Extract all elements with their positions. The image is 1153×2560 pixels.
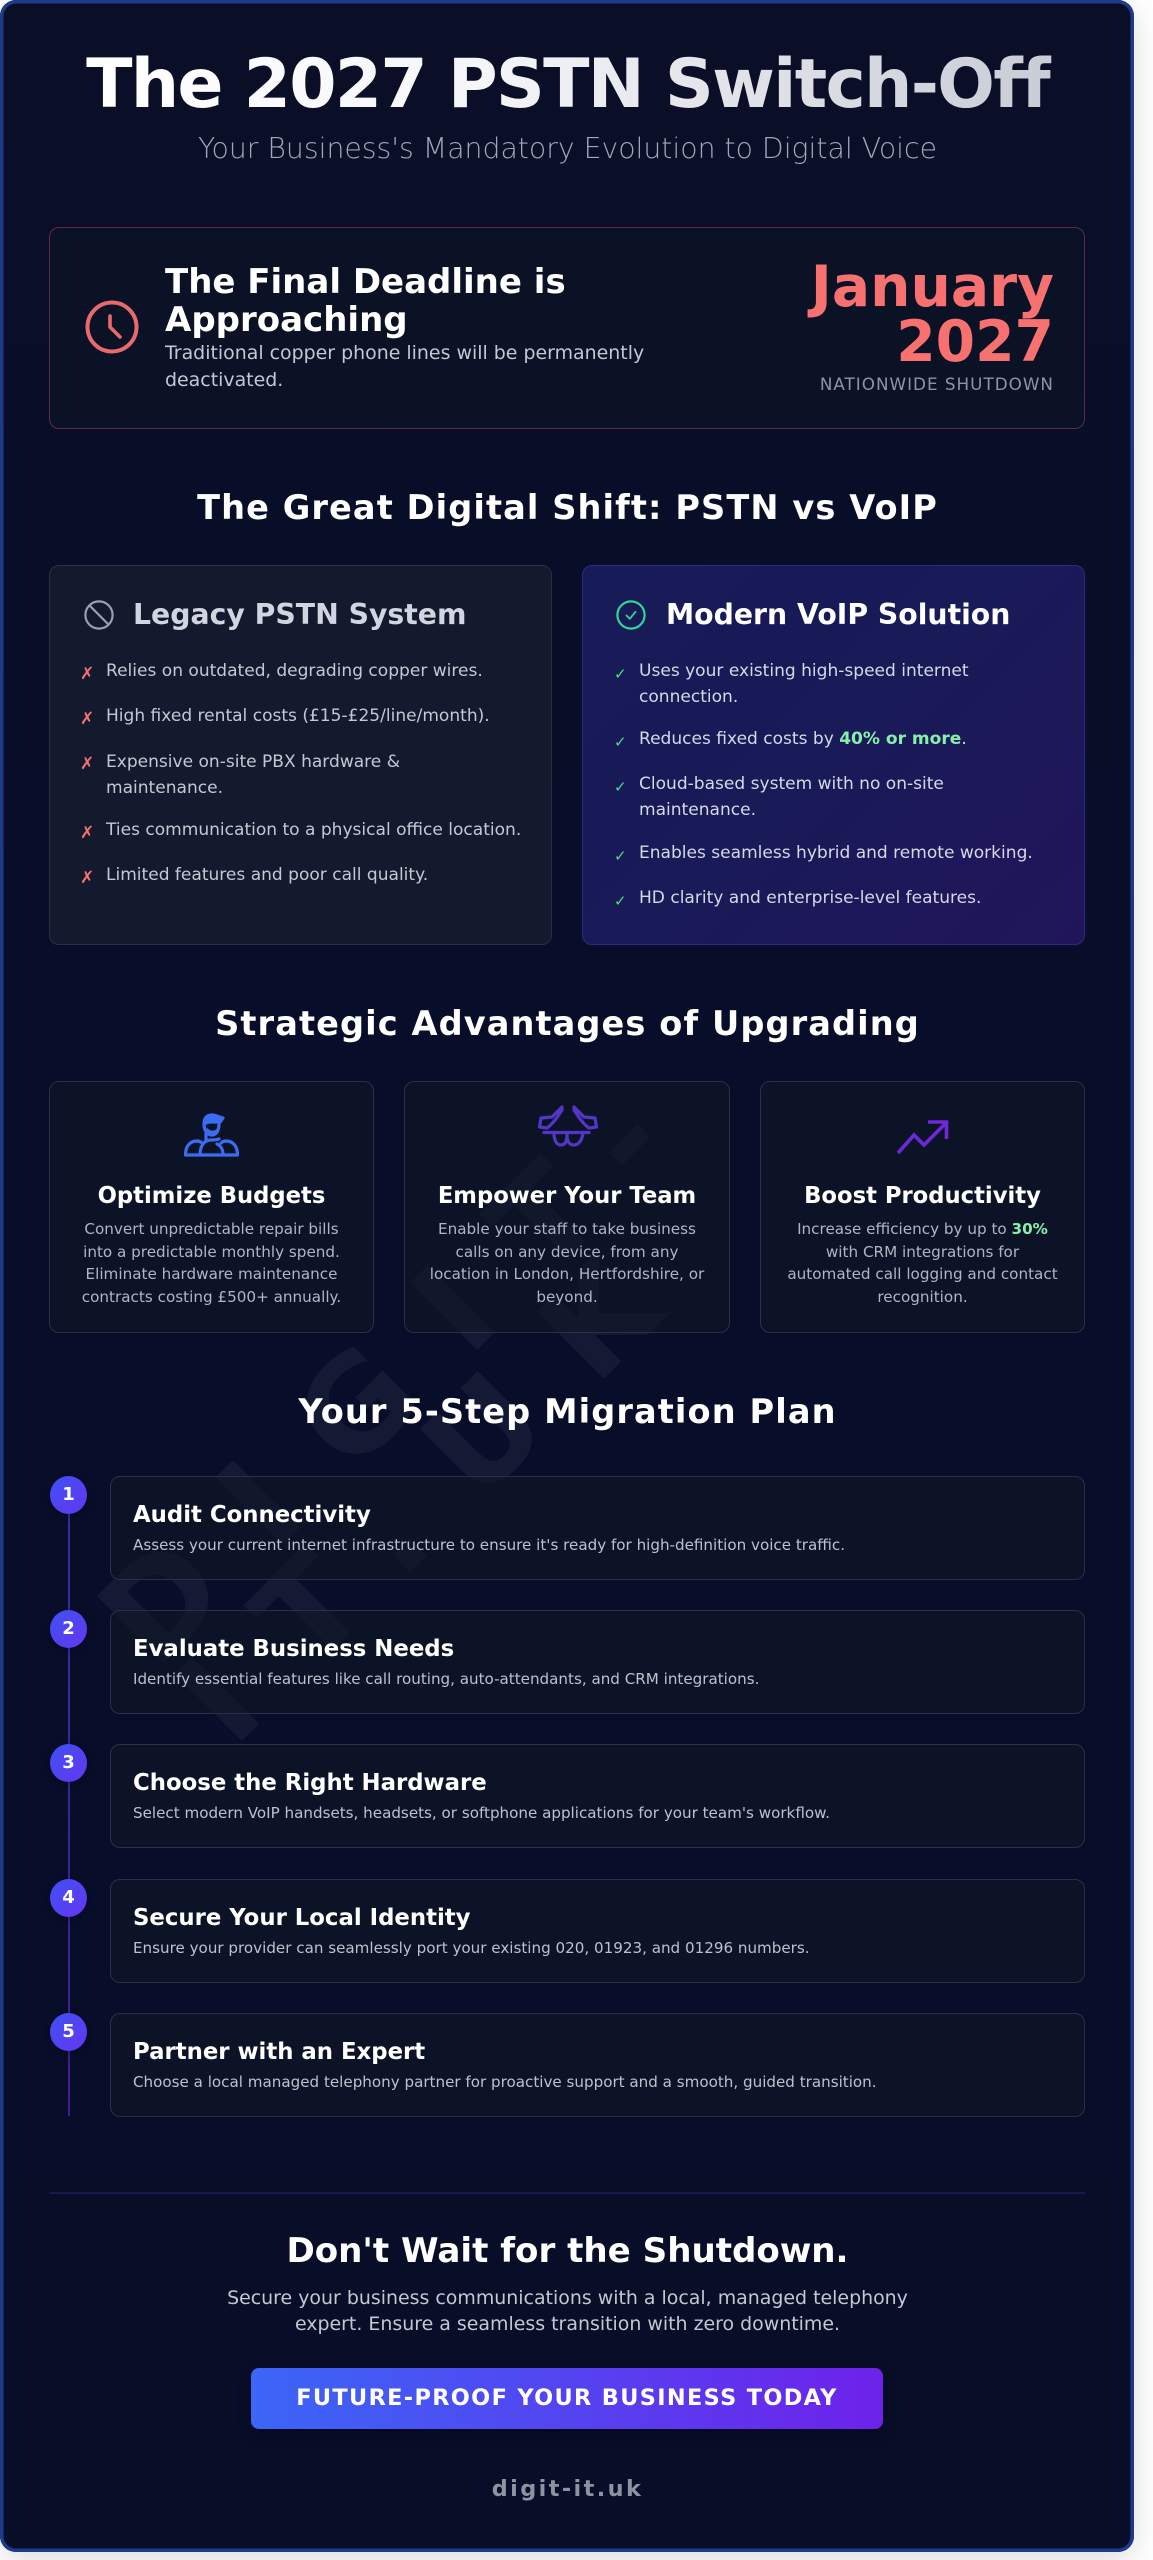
card description: Enable your staff to take business <box>438 1220 696 1238</box>
heading: migration plan: Your 5-Step Migration Plan <box>298 1392 837 1431</box>
step 2 badge <box>50 1610 87 1648</box>
item text 3: Expensive on-site PBX hardware & <box>106 752 400 772</box>
card description: into a predictable monthly spend. <box>83 1243 340 1261</box>
card title: Optimize Budgets <box>98 1183 325 1209</box>
card description: with CRM integrations for <box>826 1243 1019 1261</box>
panel: optimize budgets <box>49 1081 374 1333</box>
icon: budgets person <box>184 1113 239 1157</box>
step title: Secure Your Local Identity <box>133 1905 471 1931</box>
step 3 badge: 3 <box>62 1752 75 1773</box>
call to action text: Secure your business communications with a local, managed telephony <box>227 2287 908 2309</box>
button: FUTURE-PROOF YOUR BUSINESS TODAY <box>296 2385 838 2411</box>
step 4 <box>110 1879 1085 1983</box>
list item 2: ✗ <box>80 709 94 729</box>
item text 4: Enables seamless hybrid and remote working. <box>639 843 1033 863</box>
step description: Choose a local managed telephony partner for proactive support and a smooth, guided transition. <box>133 2073 877 2091</box>
icon: trending up <box>896 1120 948 1154</box>
title: The 2027 PSTN Switch-Off <box>86 45 1049 124</box>
panel: final deadline alert <box>49 227 1085 429</box>
card description <box>430 1220 704 1306</box>
item text 2: Reduces fixed costs by 40% or more. <box>639 729 967 749</box>
item text 1: Uses your existing high-speed internet <box>639 661 969 681</box>
panel: boost productivity <box>760 1081 1085 1333</box>
call to action heading: Don't Wait for the Shutdown. <box>286 2231 849 2271</box>
icon: team hands <box>538 1105 598 1147</box>
card title: Empower Your Team <box>438 1183 696 1209</box>
card description: location in London, Hertfordshire, or <box>430 1265 704 1283</box>
divider <box>49 2192 1085 2194</box>
step description: Ensure your provider can seamlessly port your existing 020, 01923, and 01296 numbers. <box>133 1939 810 1957</box>
step title: Choose the Right Hardware <box>133 1770 487 1796</box>
card description: Eliminate hardware maintenance <box>86 1265 337 1283</box>
watermark: IT.UK <box>148 1188 731 1771</box>
list item 5: ✗ <box>80 868 94 888</box>
item text 1: Relies on outdated, degrading copper wires. <box>106 661 483 681</box>
timeline line <box>68 1495 70 2116</box>
item text 5: HD clarity and enterprise-level features. <box>639 888 981 908</box>
step 3 badge <box>50 1744 87 1782</box>
item text 3: maintenance. <box>106 778 223 798</box>
card description: calls on any device, from any <box>456 1243 678 1261</box>
step 5 <box>110 2013 1085 2117</box>
item text 3: Cloud-based system with no on-site <box>639 774 944 794</box>
card description <box>82 1220 341 1306</box>
step 4 badge: 4 <box>62 1887 75 1908</box>
check 5: ✓ <box>614 892 627 910</box>
alert heading: The Final Deadline is <box>165 262 566 302</box>
alert description: Traditional copper phone lines will be permanently <box>165 342 644 364</box>
step 4 badge <box>50 1879 87 1917</box>
item text 3: maintenance. <box>639 800 756 820</box>
panel heading: Legacy PSTN System <box>133 598 466 631</box>
list item 1: ✗ <box>80 664 94 684</box>
item text 3 <box>106 752 400 798</box>
card title: Boost Productivity <box>804 1183 1041 1209</box>
step title: Partner with an Expert <box>133 2039 425 2065</box>
step 1 badge: 1 <box>62 1484 75 1505</box>
check 3: ✓ <box>614 778 627 796</box>
watermark: DIGIT- <box>70 1024 740 1694</box>
heading: PSTN vs VoIP: The Great Digital Shift: PSTN vs VoIP <box>197 488 938 527</box>
item text 3 <box>639 774 944 820</box>
card description <box>787 1220 1058 1306</box>
step 5 badge <box>50 2013 87 2051</box>
card description: contracts costing £500+ annually. <box>82 1288 341 1306</box>
panel: legacy PSTN <box>49 565 552 945</box>
date callout: January <box>811 254 1054 320</box>
card description: recognition. <box>877 1288 968 1306</box>
call to action text <box>227 2287 908 2335</box>
date callout: 2027 <box>896 309 1054 375</box>
icon: prohibited <box>84 600 114 630</box>
alert heading <box>165 262 566 340</box>
date caption: NATIONWIDE SHUTDOWN <box>820 374 1054 394</box>
card description: Convert unpredictable repair bills <box>84 1220 339 1238</box>
step 3 <box>110 1744 1085 1848</box>
card description: Increase efficiency by up to 30% <box>797 1220 1048 1238</box>
step title: Audit Connectivity <box>133 1502 371 1528</box>
step 1 badge <box>50 1476 87 1514</box>
alert heading: Approaching <box>165 300 408 340</box>
alert description <box>164 342 644 391</box>
step 2 <box>110 1610 1085 1714</box>
date callout <box>808 254 1054 375</box>
panel: empower your team <box>404 1081 730 1333</box>
step 2 badge: 2 <box>62 1618 75 1639</box>
panel heading: Modern VoIP Solution <box>666 598 1010 631</box>
card description: automated call logging and contact <box>787 1265 1058 1283</box>
check 2: ✓ <box>614 733 627 751</box>
step 5 badge: 5 <box>62 2021 75 2042</box>
step 1 <box>110 1476 1085 1580</box>
item text 5: Limited features and poor call quality. <box>106 865 428 885</box>
item text 4: Ties communication to a physical office location. <box>106 820 521 840</box>
step description: Identify essential features like call routing, auto-attendants, and CRM integrations. <box>133 1670 759 1688</box>
heading: strategic advantages: Strategic Advantages of Upgrading <box>215 1004 920 1043</box>
panel: modern VoIP <box>582 565 1085 945</box>
subtitle: Your Business's Mandatory Evolution to Digital Voice <box>198 132 937 165</box>
step description: Select modern VoIP handsets, headsets, or softphone applications for your team's workflow. <box>133 1804 830 1822</box>
step title: Evaluate Business Needs <box>133 1636 454 1662</box>
check 4: ✓ <box>614 847 627 865</box>
call to action text: expert. Ensure a seamless transition with zero downtime. <box>295 2313 840 2335</box>
item text 1: connection. <box>639 687 738 707</box>
item text 2: High fixed rental costs (£15-£25/line/month). <box>106 706 490 726</box>
step description: Assess your current internet infrastructure to ensure it's ready for high-definition voice traffic. <box>133 1536 845 1554</box>
check 1: ✓ <box>614 665 627 683</box>
item text 1 <box>639 661 969 707</box>
icon: clock <box>86 300 138 354</box>
list item 3: ✗ <box>80 754 94 774</box>
list item 4: ✗ <box>80 823 94 843</box>
alert description: deactivated. <box>165 369 283 391</box>
button <box>251 2368 883 2429</box>
icon: check circle <box>616 600 646 630</box>
footer site name: digit-it.uk <box>492 2476 643 2502</box>
card description: beyond. <box>536 1288 598 1306</box>
